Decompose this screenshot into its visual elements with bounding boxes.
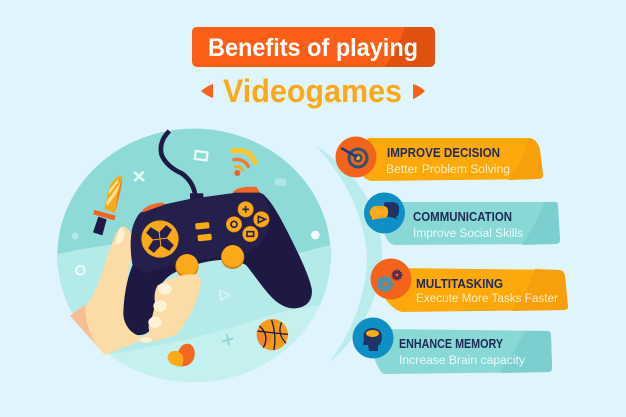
decorative shapes — [72, 151, 320, 346]
icon: wifi — [233, 151, 255, 176]
icon: speech bubbles — [364, 192, 405, 234]
title text line 1: Benefits of playing — [208, 34, 418, 62]
shoulder buttons — [141, 203, 165, 212]
illustration circle — [57, 128, 331, 382]
hand — [70, 226, 142, 355]
controller cable — [161, 131, 203, 201]
icon: basketball — [257, 319, 288, 350]
icon: target — [336, 136, 376, 178]
left title arrow — [201, 84, 213, 98]
thumb nail — [116, 228, 125, 244]
subtext: Execute More Tasks Faster — [416, 293, 558, 305]
subtext: Increase Brain capacity — [399, 355, 525, 367]
card: enhance memory — [352, 318, 552, 374]
right title arrow — [413, 84, 425, 99]
icon: head — [352, 318, 394, 358]
card: improve decision — [336, 136, 543, 181]
icon: sword — [93, 176, 122, 235]
face buttons — [226, 202, 269, 242]
center buttons — [195, 222, 210, 230]
card: multitasking — [370, 258, 568, 312]
d-pad — [139, 218, 181, 260]
icon: gears — [370, 258, 412, 300]
controller body — [123, 187, 312, 335]
card: communication — [364, 192, 560, 245]
title text line 2: Videogames — [223, 73, 402, 109]
joysticks — [175, 245, 244, 278]
heading: IMPROVE DECISION — [387, 146, 500, 160]
heading: COMMUNICATION — [413, 210, 512, 224]
heading: MULTITASKING — [416, 277, 503, 291]
title banner — [192, 27, 435, 67]
fingers — [140, 274, 201, 343]
heading: ENHANCE MEMORY — [399, 337, 504, 351]
icon: heart — [168, 344, 195, 366]
subtext: Better Problem Solving — [386, 164, 510, 176]
crescent arc — [315, 145, 382, 362]
subtext: Improve Social Skills — [413, 228, 523, 240]
